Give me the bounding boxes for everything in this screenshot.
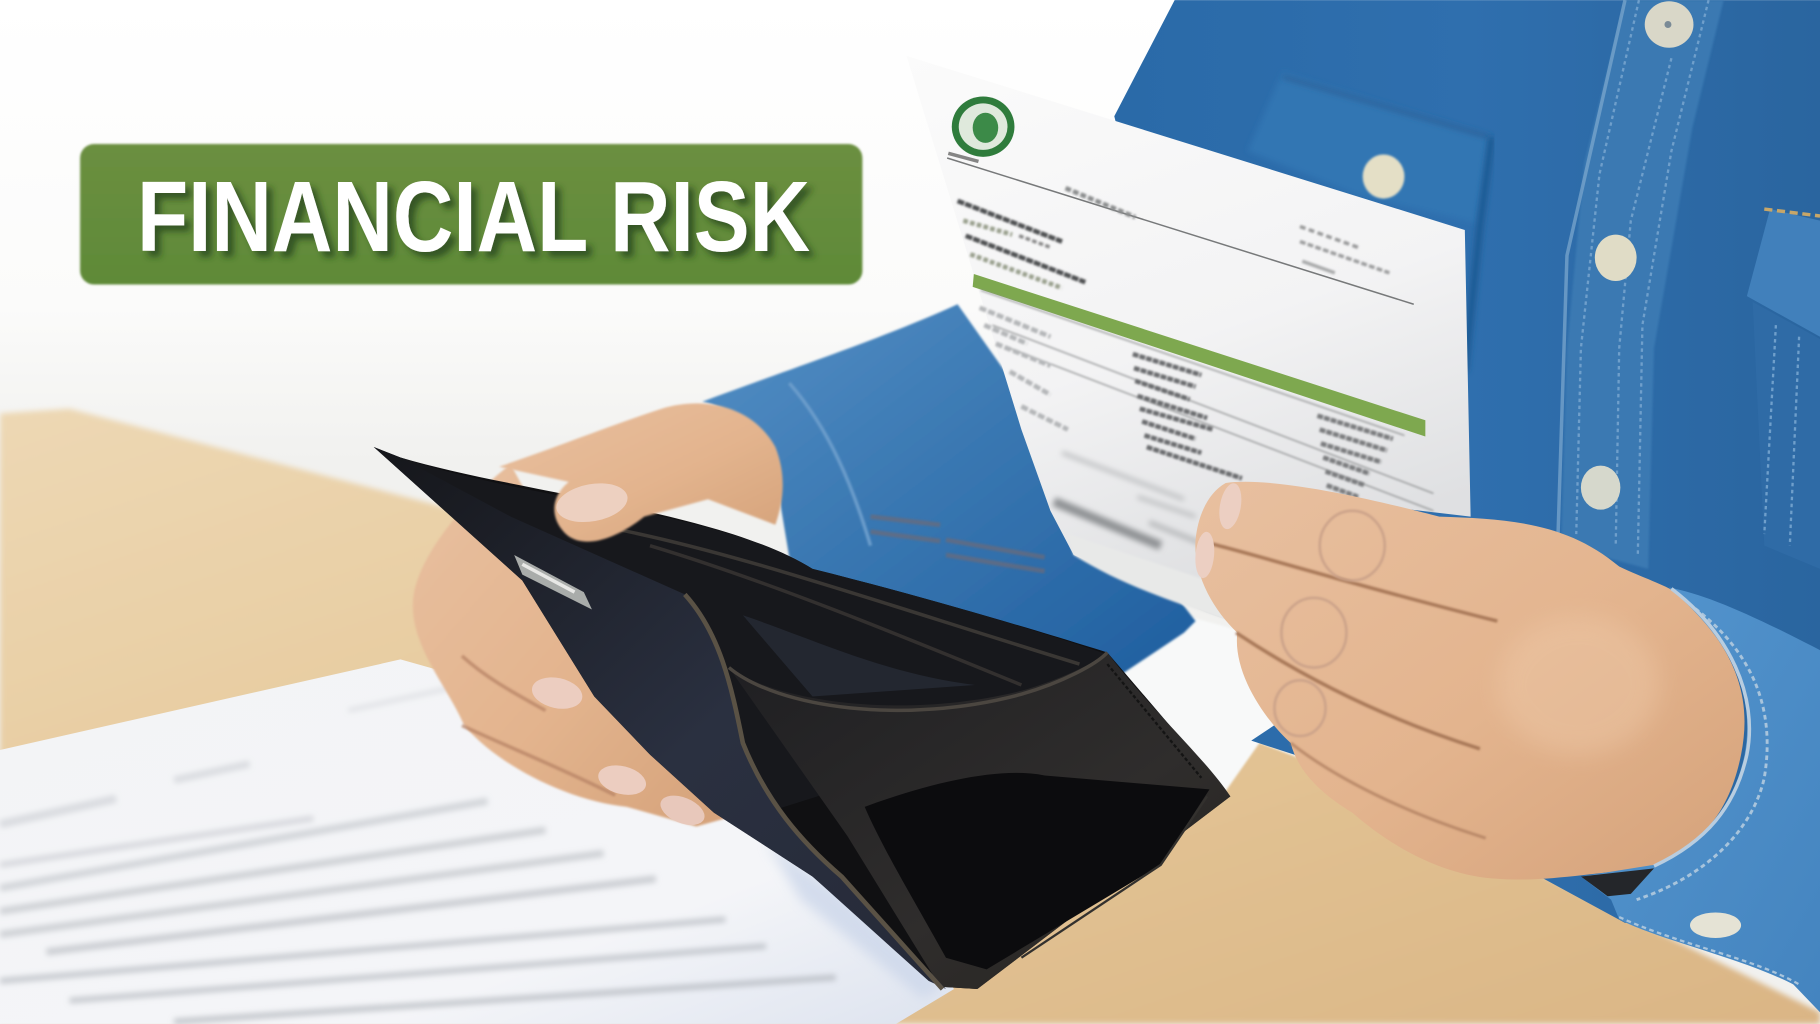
right hand holding the document xyxy=(1194,482,1745,880)
knuckles xyxy=(1274,511,1385,736)
finger separations xyxy=(1209,543,1497,838)
denim shirt cuff xyxy=(1581,587,1820,1012)
title badge xyxy=(80,144,862,284)
left thumb over wallet xyxy=(499,403,783,542)
wallet silhouette xyxy=(374,447,1230,989)
document lying on the table xyxy=(0,659,954,1024)
shirt buttons xyxy=(1645,1,1693,48)
denim shirt torso xyxy=(1114,0,1820,923)
header rule xyxy=(947,158,1414,304)
table rules and text xyxy=(980,290,1433,511)
empty black wallet xyxy=(374,447,1230,989)
blue shadow beside the wallet xyxy=(766,842,942,998)
hand highlight xyxy=(1497,615,1660,755)
fingernails xyxy=(529,673,585,713)
fingertip nails xyxy=(1216,482,1245,531)
left hand palm and fingers behind wallet xyxy=(413,464,725,831)
curled lower paper edge xyxy=(1068,534,1230,621)
wallet left leaf xyxy=(374,447,946,989)
breast pocket flap xyxy=(1248,72,1492,223)
blurred printed text on the lying document xyxy=(0,685,836,1022)
held financial document xyxy=(907,56,1471,621)
wooden table xyxy=(0,409,1820,1024)
wallet metal plate xyxy=(514,555,592,610)
left arm sleeve xyxy=(702,304,1196,679)
logo seal xyxy=(952,96,1014,157)
wallet inner back leaf xyxy=(400,457,1114,813)
blurred lower text on the document xyxy=(1054,453,1207,546)
button placket xyxy=(1561,0,1724,569)
chest pocket on the right xyxy=(1747,209,1820,337)
white gap behind the hand xyxy=(1103,615,1306,801)
wallet front pocket xyxy=(729,652,1230,989)
document title and address text xyxy=(958,188,1389,288)
title text: FINANCIAL RISK xyxy=(137,162,810,273)
green table header bar xyxy=(973,274,1425,437)
wallet dark inner fold xyxy=(865,773,1209,969)
